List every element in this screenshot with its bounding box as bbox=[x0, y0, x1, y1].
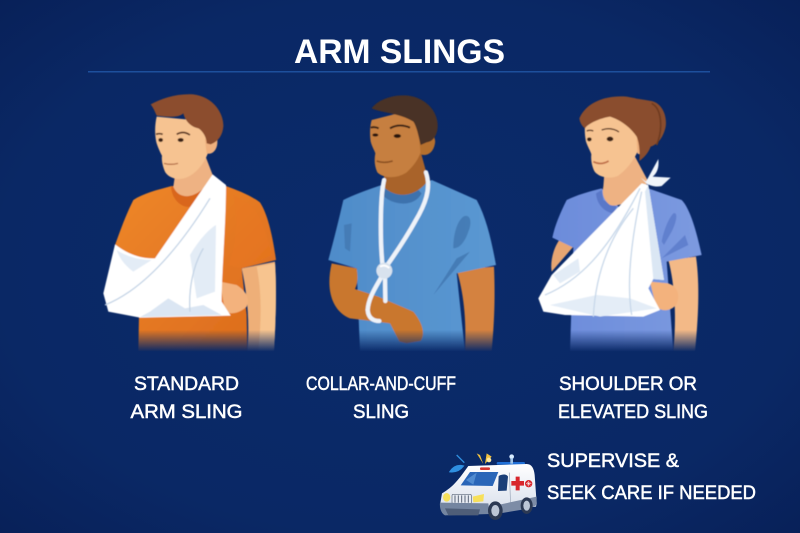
label: standard arm sling: ARM SLING bbox=[130, 402, 242, 423]
figure: standard arm sling bbox=[103, 94, 276, 352]
label: collar-and-cuff sling: SLING bbox=[353, 402, 409, 423]
label: shoulder or elevated sling: SHOULDER OR bbox=[559, 374, 697, 395]
callout: supervise and seek care: SEEK CARE IF NEEDED bbox=[547, 483, 756, 504]
callout: supervise and seek care bbox=[547, 451, 756, 504]
figure: shoulder or elevated sling bbox=[538, 96, 702, 352]
label: shoulder or elevated sling: ELEVATED SLING bbox=[558, 402, 708, 423]
figure: collar-and-cuff sling bbox=[328, 95, 496, 352]
label: standard arm sling bbox=[130, 374, 242, 423]
label: shoulder or elevated sling bbox=[558, 374, 708, 423]
icon: ambulance bbox=[440, 453, 537, 520]
label: standard arm sling: STANDARD bbox=[134, 374, 239, 395]
label: collar-and-cuff sling bbox=[306, 374, 456, 423]
callout: supervise and seek care: SUPERVISE & bbox=[547, 451, 679, 472]
label: collar-and-cuff sling: COLLAR-AND-CUFF bbox=[306, 374, 456, 395]
title: ARM SLINGS bbox=[294, 33, 505, 71]
